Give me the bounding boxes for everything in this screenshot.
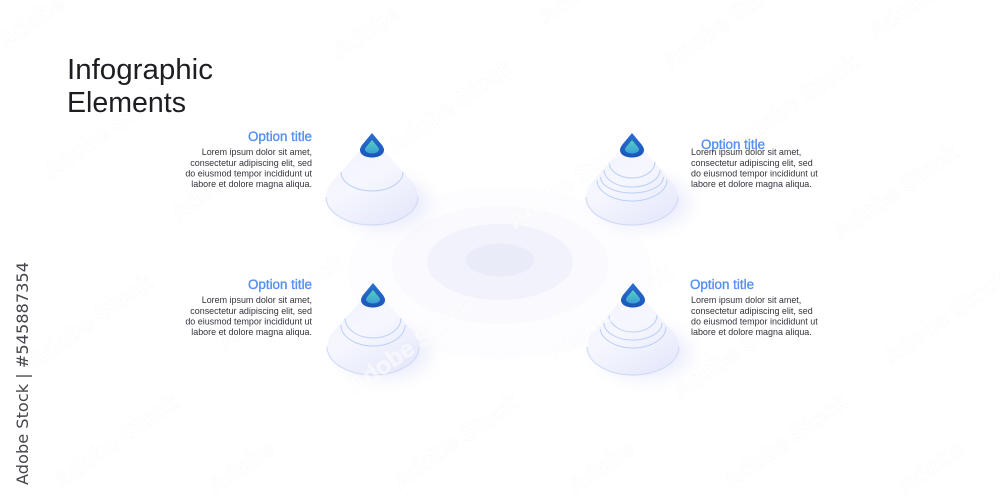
watermark: repeated stock text: Adobe Stock: [23, 268, 159, 375]
watermark: repeated stock text: Adobe Stock: [383, 53, 519, 160]
title: [67, 54, 213, 119]
icon: drop bottom right: [621, 283, 645, 308]
text block: bottom left option: labore et dolore magna aliqua.: [191, 327, 312, 337]
text block: bottom left option: consectetur adipiscing elit, sed: [190, 306, 312, 316]
watermark: repeated stock text: Adobe Stock: [213, 248, 349, 355]
watermark: repeated stock text: Adobe Stock: [38, 78, 174, 185]
text block: bottom left option: Lorem ipsum dolor sit amet,: [202, 295, 312, 305]
text block: bottom left option: do eiusmod tempor incididunt ut: [185, 316, 313, 326]
watermark: repeated stock text: Adobe Stock: [668, 298, 804, 405]
watermark: repeated stock text: Adobe Stock: [718, 388, 854, 495]
text block: top right option: consectetur adipiscing elit, sed: [691, 158, 813, 168]
text block: top right option: Lorem ipsum dolor sit amet,: [691, 147, 801, 157]
watermark: repeated stock text: Adobe: [328, 0, 405, 65]
title: Infographic: [67, 54, 213, 86]
text block: top right option: [691, 137, 818, 189]
text block: top left option: Option title: [248, 129, 312, 144]
text block: top right option: labore et dolore magna aliqua.: [691, 179, 812, 189]
watermark: repeated stock text: Adobe Stock: [503, 128, 639, 235]
icon: drop top right: [620, 133, 644, 158]
watermark: repeated stock text: Adobe Stock: [388, 388, 524, 495]
watermark: repeated stock text: Adobe: [893, 435, 970, 500]
text block: top right option: Option title: [701, 137, 765, 152]
text block: bottom right option: Option title: [690, 277, 754, 292]
cone 4: bottom right: [587, 287, 689, 377]
text block: bottom left option: Option title: [248, 277, 312, 292]
watermark: repeated stock text: Adobe Stock: [343, 293, 479, 400]
stock id vertical label: Adobe Stock | #545887354: [13, 262, 32, 485]
text block: top left option: [185, 129, 313, 189]
watermark: repeated stock text: Adobe Stock: [48, 388, 184, 495]
cone 3: bottom left: [327, 287, 429, 377]
text block: top left option: Lorem ipsum dolor sit amet,: [202, 147, 312, 157]
icon: drop bottom left: [361, 283, 385, 308]
watermark: repeated stock text: Adobe: [563, 435, 640, 500]
text block: bottom right option: labore et dolore magna aliqua.: [691, 327, 812, 337]
watermark: repeated stock text: Adobe Stock: [828, 138, 964, 245]
watermark: repeated stock text: Adobe: [203, 435, 280, 500]
text block: bottom right option: consectetur adipiscing elit, sed: [691, 306, 813, 316]
central platform: concentric ellipses: [348, 187, 652, 359]
text block: top left option: labore et dolore magna aliqua.: [191, 179, 312, 189]
text block: bottom right option: do eiusmod tempor incididunt ut: [691, 316, 818, 326]
cone 1: top left: [326, 137, 428, 227]
text block: top left option: do eiusmod tempor incididunt ut: [185, 168, 313, 178]
watermark: repeated stock text: Adobe: [166, 162, 243, 227]
text block: bottom right option: [690, 277, 818, 337]
cone 2: top right: [586, 137, 688, 227]
watermark: repeated stock text: Adobe Stock: [728, 48, 864, 155]
text block: bottom right option: Lorem ipsum dolor sit amet,: [691, 295, 801, 305]
text block: bottom left option: [185, 277, 313, 337]
icon: drop top left: [360, 133, 384, 158]
text block: top left option: consectetur adipiscing elit, sed: [190, 158, 312, 168]
text block: top right option: do eiusmod tempor incididunt ut: [691, 168, 818, 178]
title: Elements: [67, 87, 186, 119]
watermark: repeated stock text: Adobe Stock: [543, 258, 679, 365]
